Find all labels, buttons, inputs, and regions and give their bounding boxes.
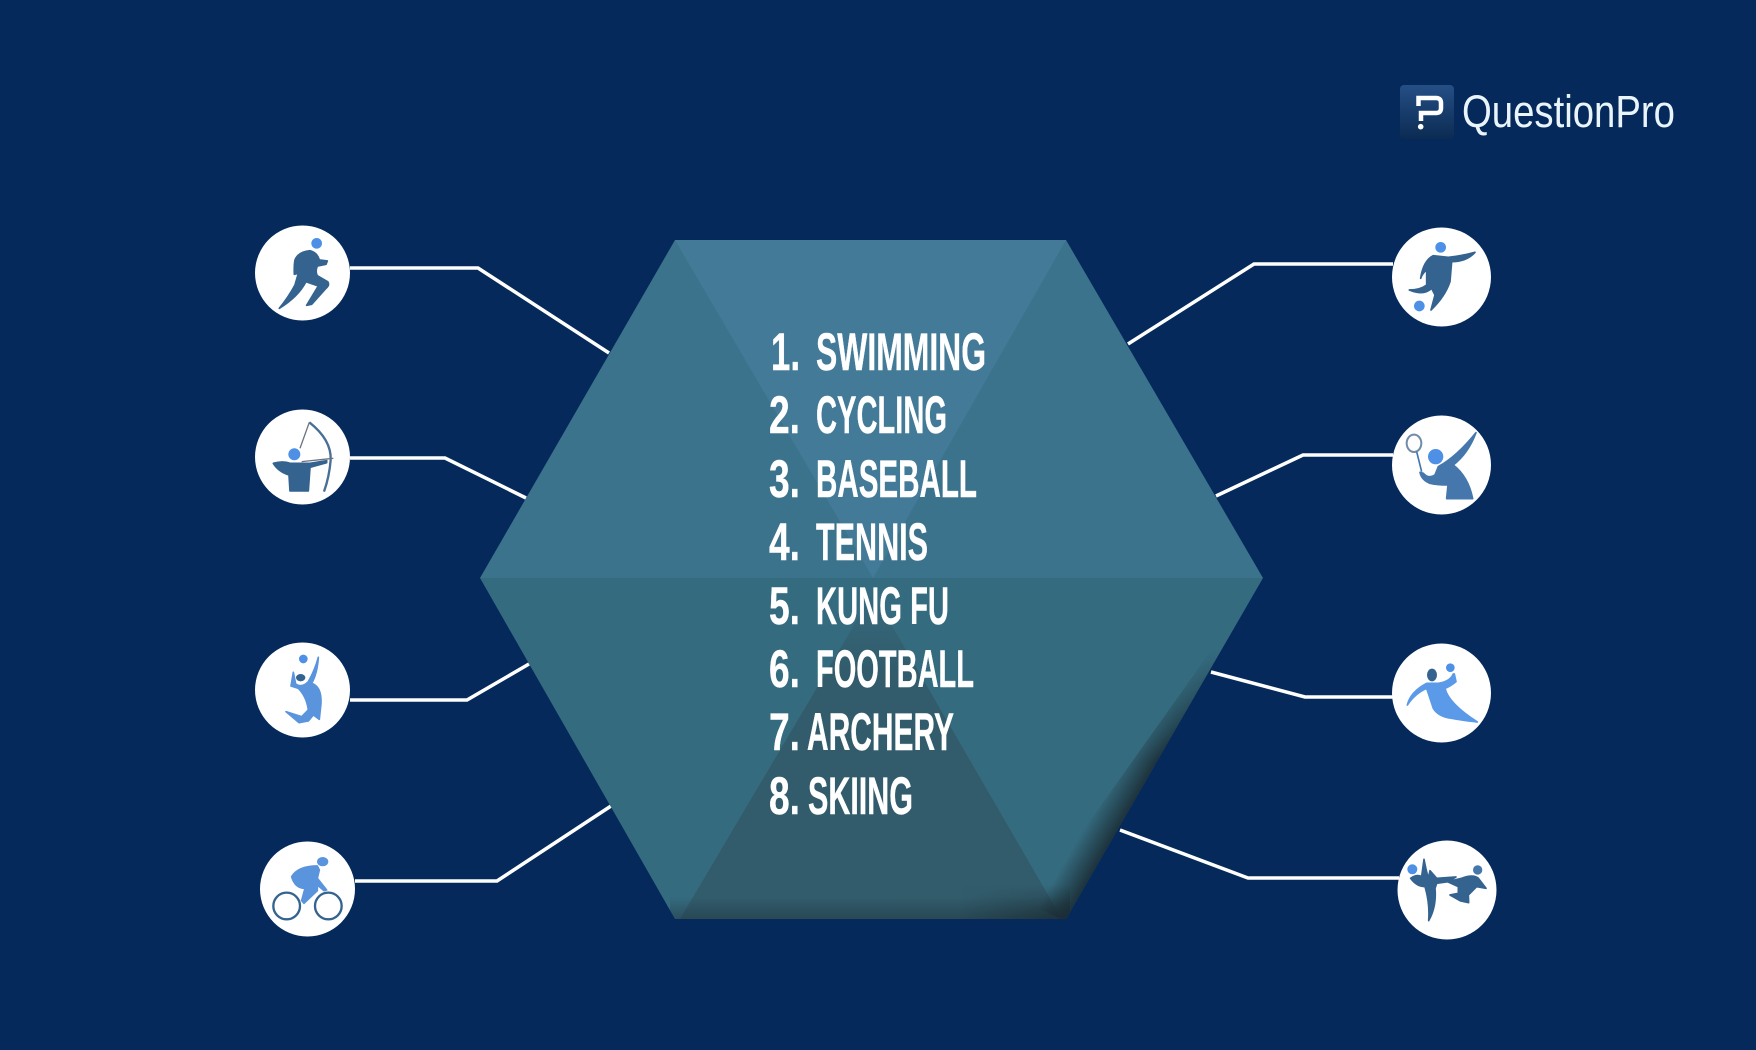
item 4: TENNIS (816, 513, 928, 572)
item 1: SWIMMING (816, 323, 986, 382)
item 1 (771, 323, 986, 382)
item 6: FOOTBALL (816, 640, 974, 699)
icon: kung fu fighters (1398, 840, 1496, 940)
item 7: 7. (769, 703, 800, 762)
logo: QuestionPro (1400, 85, 1675, 139)
icon: badminton player (1392, 416, 1491, 514)
item 2 (769, 386, 947, 445)
item 7: ARCHERY (807, 703, 954, 762)
infographic canvas (255, 85, 1674, 940)
item 6: 6. (769, 640, 800, 699)
item 2: CYCLING (816, 386, 947, 445)
central hexagon (470, 235, 1270, 925)
item 8 (769, 767, 913, 826)
item 3 (769, 450, 977, 509)
item 3: 3. (769, 450, 800, 509)
icon: handball player (1392, 644, 1491, 742)
item 4: 4. (769, 513, 800, 572)
sports list (769, 323, 986, 826)
item 7 (769, 703, 954, 762)
item 5 (769, 577, 949, 636)
item 3: BASEBALL (816, 450, 977, 509)
item 5: KUNG FU (816, 577, 949, 636)
item 1: 1. (771, 323, 800, 382)
icon: archer (255, 410, 350, 504)
icon: volleyball player (255, 642, 350, 738)
item 5: 5. (769, 577, 800, 636)
logo mark (1400, 85, 1454, 139)
item 8: SKIING (808, 767, 913, 826)
logo wordmark: QuestionPro (1462, 86, 1675, 137)
icon: cyclist (260, 842, 355, 936)
icon: runner (255, 226, 350, 320)
item 6 (769, 640, 974, 699)
item 2: 2. (769, 386, 800, 445)
icon: footballer (1392, 228, 1491, 326)
item 8: 8. (769, 767, 800, 826)
item 4 (769, 513, 928, 572)
connector lines (350, 264, 1399, 881)
